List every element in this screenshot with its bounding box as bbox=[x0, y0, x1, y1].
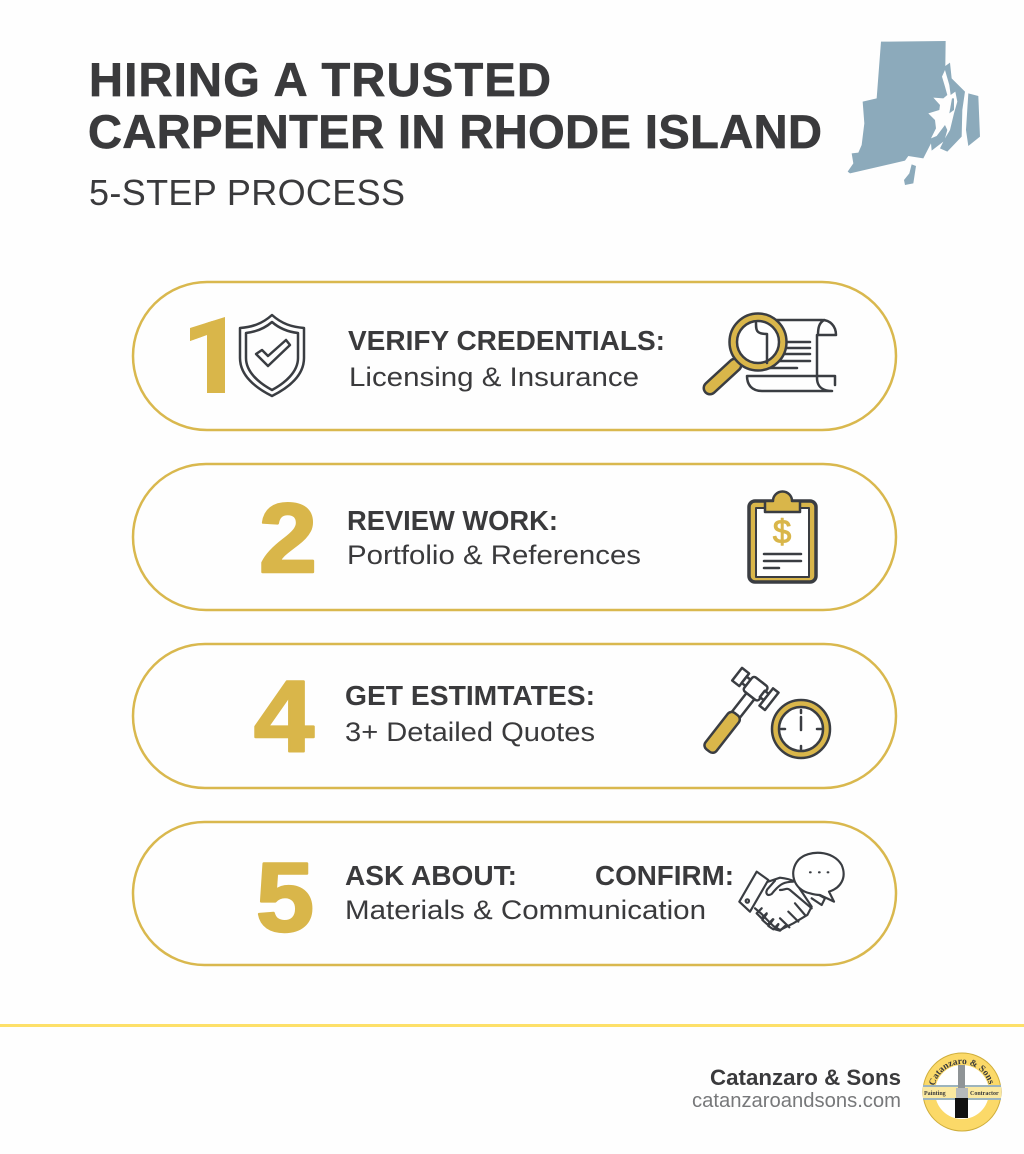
footer brand text: Catanzaro & Sons bbox=[710, 1065, 901, 1090]
step 4 text: GET ESTIMTATES: bbox=[345, 680, 595, 711]
icon: clipboard with dollar bbox=[749, 492, 816, 582]
panel: step 2 bbox=[133, 464, 896, 610]
icon: Rhode Island map bbox=[848, 41, 980, 185]
icon: shield bbox=[240, 315, 304, 396]
logo bbox=[922, 1052, 1002, 1132]
footer brand text: catanzaroandsons.com bbox=[692, 1090, 901, 1112]
footer brand text bbox=[692, 1065, 901, 1112]
icon: magnifier and document bbox=[710, 314, 836, 391]
logo: Painting bbox=[924, 1091, 946, 1097]
footer divider bbox=[0, 1024, 1024, 1027]
title: CARPENTER IN RHODE ISLAND bbox=[88, 105, 822, 158]
step 4 text: 3+ Detailed Quotes bbox=[345, 717, 595, 747]
step 1 text: VERIFY CREDENTIALS: bbox=[348, 325, 665, 356]
step 5 text: Materials & Communication bbox=[345, 895, 706, 925]
step number 1: 1 bbox=[180, 299, 250, 416]
subtitle: 5-STEP PROCESS bbox=[89, 172, 405, 213]
icon: handshake and speech bubble bbox=[739, 853, 844, 931]
step 2 text bbox=[347, 505, 641, 570]
icon: hammer and clock bbox=[689, 666, 830, 763]
panel: step 1 bbox=[133, 282, 896, 430]
step 5 text bbox=[345, 860, 734, 925]
panel: step 5 bbox=[133, 822, 896, 965]
step number 2: 2 bbox=[259, 483, 317, 593]
step 1 text bbox=[348, 325, 665, 392]
step 5 text: ASK ABOUT: bbox=[345, 860, 517, 891]
icon: clipboard with dollar: $ bbox=[773, 513, 791, 550]
logo: Catanzaro & Sons bbox=[929, 1060, 993, 1085]
step number 5: 5 bbox=[256, 842, 314, 952]
title bbox=[88, 53, 822, 158]
step 1 text: Licensing & Insurance bbox=[349, 362, 639, 392]
step 2 text: Portfolio & References bbox=[347, 540, 641, 570]
panel: step 4 bbox=[133, 644, 896, 788]
step number 4: 4 bbox=[254, 661, 314, 773]
step 4 text bbox=[345, 680, 595, 747]
logo: Contractor bbox=[970, 1091, 999, 1097]
step 5 text: CONFIRM: bbox=[595, 860, 734, 891]
title: HIRING A TRUSTED bbox=[89, 53, 551, 106]
step 2 text: REVIEW WORK: bbox=[347, 505, 558, 536]
